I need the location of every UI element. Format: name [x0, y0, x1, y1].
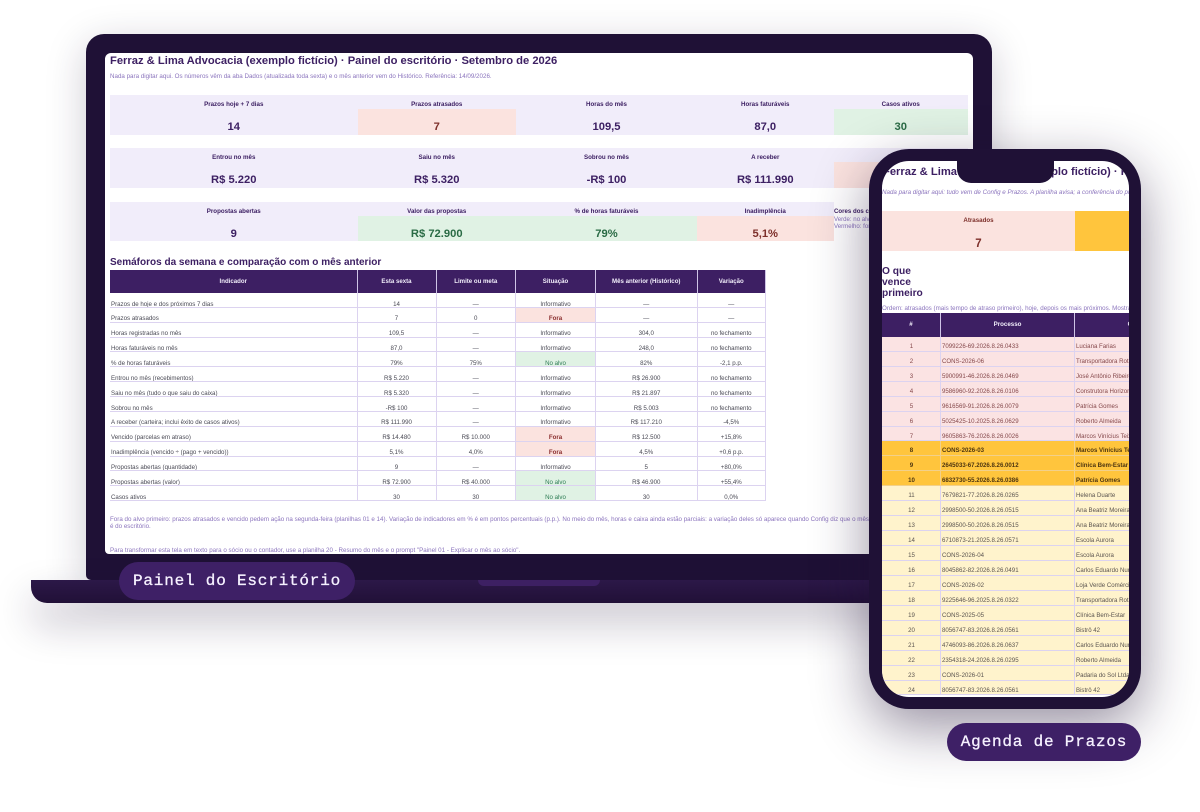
row 5	[882, 397, 1200, 412]
row 7: 9605863-76.2026.8.26.0026	[942, 433, 1019, 440]
row: sobrou: —	[473, 405, 479, 412]
row 20: Bistrô 42	[1076, 627, 1100, 634]
row 3	[882, 367, 1200, 382]
row 18: 9225646-96.2025.8.26.0322	[942, 597, 1019, 604]
row: prazos atrasados: —	[728, 315, 734, 322]
row 15: CONS-2026-04	[942, 552, 984, 559]
KPI: propostas abertas: Propostas abertas	[207, 208, 261, 215]
KPI: a receber: R$ 111.990	[737, 174, 794, 186]
row: entrou: R$ 26.900	[632, 375, 660, 382]
row: inadimplência: +0,6 p.p.	[719, 449, 743, 456]
row: saiu: Informativo	[540, 390, 571, 397]
row 11: Helena Duarte	[1076, 492, 1115, 499]
KPI: casos ativos	[834, 95, 968, 134]
phone	[869, 149, 1141, 709]
row: percentual de horas: 82%	[640, 360, 652, 367]
KPI: horas faturáveis	[697, 95, 834, 134]
row 2	[882, 352, 1200, 367]
row 22: 22	[908, 657, 915, 664]
row: a receber: R$ 111.990	[381, 419, 412, 426]
row 17: CONS-2026-02	[942, 582, 984, 589]
row 9: Clínica Bem-Estar	[1076, 462, 1128, 469]
row: propostas quantidade: —	[473, 464, 479, 471]
KPI: a receber: A receber	[751, 154, 779, 161]
row 17: 17	[908, 582, 915, 589]
row: inadimplência: Fora	[549, 449, 562, 456]
KPI: entrou no mês: Entrou no mês	[212, 154, 255, 161]
row: propostas valor	[110, 471, 766, 486]
row 6: Roberto Almeida	[1076, 418, 1121, 425]
KPI: prazos hoje + 7 dias	[110, 95, 358, 134]
row 22: 2354318-24.2026.8.26.0295	[942, 657, 1019, 664]
row 5: 9616569-91.2026.8.26.0079	[942, 403, 1019, 410]
row: horas faturáveis: 248,0	[639, 345, 654, 352]
KPI: saiu no mês	[358, 148, 516, 188]
row 12: 2998500-50.2026.8.26.0515	[942, 507, 1019, 514]
KPI: prazos hoje + 7 dias: Prazos hoje + 7 dias	[204, 101, 263, 108]
row: vencido: +15,8%	[721, 434, 742, 441]
row: horas faturáveis: 87,0	[391, 345, 402, 352]
row 23: Padaria do Sol Ltda	[1076, 672, 1129, 679]
KPI: sobrou no mês: -R$ 100	[587, 174, 626, 186]
row: propostas valor: Propostas abertas (valor)	[111, 479, 180, 486]
row 12: 12	[908, 507, 915, 514]
KPI: propostas abertas: 9	[231, 228, 237, 240]
row 19: Clínica Bem-Estar	[1076, 612, 1125, 619]
row 16	[882, 561, 1200, 576]
KPI: inadimplência: 5,1%	[752, 228, 778, 240]
row 6: 6	[910, 418, 913, 425]
row 6	[882, 412, 1200, 427]
row 9	[882, 456, 1200, 471]
row: propostas quantidade: Informativo	[540, 464, 571, 471]
row 24	[882, 681, 1200, 695]
row: saiu: Saiu no mês (tudo o que saiu do caixa)	[111, 390, 218, 397]
row 9: 9	[910, 462, 913, 469]
section heading: O que	[882, 266, 911, 276]
row: horas registradas: no fechamento	[711, 330, 752, 337]
table header: Processo	[994, 321, 1021, 328]
row: propostas quantidade: +80,0%	[721, 464, 742, 471]
row: percentual de horas: 75%	[470, 360, 482, 367]
KPI: entrou no mês: R$ 5.220	[211, 174, 256, 186]
row 19: CONS-2025-05	[942, 612, 984, 619]
row: propostas valor: No alvo	[545, 479, 566, 486]
row 19: 19	[908, 612, 915, 619]
row 2: 2	[910, 358, 913, 365]
table header: Indicador	[220, 278, 247, 285]
laptop base	[31, 580, 1047, 603]
row: casos ativos: No alvo	[545, 494, 566, 501]
phone notch	[957, 161, 1054, 183]
row 15	[882, 546, 1200, 561]
row 10: 10	[908, 477, 915, 484]
row 1: 7099226-69.2026.8.26.0433	[942, 343, 1019, 350]
row 2: CONS-2026-06	[942, 358, 984, 365]
row 14: 14	[908, 537, 915, 544]
row: casos ativos: 0,0%	[724, 494, 738, 501]
row 5: Patrícia Gomes	[1076, 403, 1118, 410]
section heading: primeiro	[882, 288, 923, 298]
KPI: valor das propostas: R$ 72.900	[411, 228, 463, 240]
row 13	[882, 516, 1200, 531]
row: percentual de horas: % de horas faturáveis	[111, 360, 170, 367]
row: a receber: Informativo	[540, 419, 571, 426]
phone screen: deadline agenda	[882, 161, 1129, 697]
label: Agenda de Prazos: Agenda de Prazos	[961, 733, 1127, 751]
row 24: Bistrô 42	[1076, 687, 1100, 694]
row 13: 13	[908, 522, 915, 529]
row 22: Roberto Almeida	[1076, 657, 1121, 664]
row: saiu: no fechamento	[711, 390, 752, 397]
row: horas registradas: —	[473, 330, 479, 337]
KPI: valor das propostas	[358, 202, 516, 241]
label: Painel do Escritório: Painel do Escritório	[133, 572, 341, 590]
row: entrou: —	[473, 375, 479, 382]
row 23: CONS-2026-01	[942, 672, 984, 679]
KPI: propostas abertas	[110, 202, 358, 241]
label: Agenda de Prazos	[947, 723, 1141, 761]
row: horas faturáveis: Horas faturáveis no mês	[111, 345, 178, 352]
row: saiu: R$ 21.897	[632, 390, 660, 397]
row 7	[882, 427, 1200, 441]
row: percentual de horas: 79%	[390, 360, 403, 367]
KPI: prazos atrasados	[358, 95, 516, 134]
KPI: entrou no mês	[110, 148, 358, 188]
KPI: horas do mês: Horas do mês	[586, 101, 627, 108]
KPI: casos ativos: Casos ativos	[882, 101, 920, 108]
KPI: atrasados: Atrasados	[963, 217, 994, 224]
row: prazos 7 dias: Informativo	[540, 300, 571, 308]
colour legend: Vermelho: fora do alvo	[834, 223, 895, 230]
KPI: prazos atrasados: 7	[434, 121, 440, 133]
laptop	[22, 24, 1012, 645]
KPI: valor das propostas: Valor das propostas	[407, 208, 466, 215]
KPI: horas do mês: 109,5	[592, 121, 620, 133]
row: propostas quantidade: 5	[645, 464, 648, 471]
row: entrou: Informativo	[540, 375, 571, 382]
row: prazos atrasados: 7	[395, 315, 398, 322]
row 11	[882, 486, 1200, 501]
row: inadimplência: 5,1%	[390, 449, 404, 456]
footnote	[110, 516, 869, 530]
colour legend: Verde: no alvo	[834, 216, 873, 223]
row 24: 24	[908, 687, 915, 694]
row 17	[882, 576, 1200, 591]
dashboard subtitle: Nada para digitar aqui. Os números vêm da aba Dados (atualizada toda sexta) e o mês anterior vem do Histórico. Referência: 14/09/2026.	[110, 72, 492, 80]
row: vencido: R$ 10.000	[462, 434, 490, 441]
row: vencido: Fora	[549, 434, 562, 441]
laptop hinge notch	[478, 580, 600, 586]
row 4: 4	[910, 388, 913, 395]
row: propostas valor: +55,4%	[721, 479, 742, 486]
KPI: horas do mês	[516, 95, 697, 134]
dashboard title: Ferraz & Lima Advocacia (exemplo fictício) · Painel do escritório · Setembro de 2026	[110, 54, 557, 66]
row 21: 21	[908, 642, 915, 649]
KPI: horas faturáveis: 87,0	[754, 121, 776, 133]
row: saiu	[110, 382, 766, 397]
row: saiu: —	[473, 390, 479, 397]
row: horas faturáveis	[110, 338, 766, 352]
row 8	[882, 441, 1200, 456]
row: prazos atrasados: —	[643, 315, 649, 322]
KPI: vencido	[834, 148, 968, 188]
row: entrou: Entrou no mês (recebimentos)	[111, 375, 194, 382]
row 7: 7	[910, 433, 913, 440]
row 3: 3	[910, 373, 913, 380]
row 5: 5	[910, 403, 913, 410]
footnote: é do escritório.	[110, 522, 151, 530]
row 18	[882, 591, 1200, 606]
row: casos ativos	[110, 486, 766, 501]
row: propostas quantidade: Propostas abertas (quantidade)	[111, 464, 197, 471]
KPI: vencido: R$ 14.480	[875, 174, 927, 186]
row: prazos 7 dias: Prazos de hoje e dos próximos 7 dias	[111, 300, 213, 308]
row 14: 6710873-21.2025.8.26.0571	[942, 537, 1019, 544]
row 6: 5025425-10.2025.8.26.0629	[942, 418, 1019, 425]
row: prazos 7 dias: —	[473, 300, 479, 308]
row 8: 8	[910, 447, 913, 454]
row 22	[882, 651, 1200, 666]
row 1: Luciana Farias	[1076, 343, 1116, 350]
row: horas registradas: Informativo	[540, 330, 571, 337]
KPI: prazos hoje + 7 dias: 14	[228, 121, 240, 133]
row: horas registradas: 109,5	[389, 330, 404, 337]
row 14: Escola Aurora	[1076, 537, 1114, 544]
KPI: atrasados: 7	[975, 238, 982, 250]
row: percentual de horas: No alvo	[545, 360, 566, 367]
row 11: 11	[908, 492, 915, 499]
row: inadimplência: Inadimplência (vencido ÷ (pago + vencido))	[111, 449, 229, 456]
deadlines table	[882, 313, 1129, 695]
row: horas faturáveis: —	[473, 345, 479, 352]
KPI: horas faturáveis: Horas faturáveis	[741, 101, 790, 108]
colour legend: Cores dos cartões	[834, 208, 887, 215]
row: entrou: R$ 5.220	[384, 375, 409, 382]
closing note: Para transformar esta tela em texto para o sócio ou o contador, use a planilha 20 - Resumo do mês e o prompt "Painel 01 - Explicar o mês ao sócio".	[110, 547, 520, 554]
table header	[110, 270, 766, 293]
row: prazos 7 dias: —	[643, 300, 649, 308]
row 4	[882, 382, 1200, 397]
row: prazos atrasados: 0	[474, 315, 477, 322]
row: casos ativos: 30	[472, 494, 479, 501]
row: horas registradas	[110, 323, 766, 338]
KPI: % de horas faturáveis: % de horas faturáveis	[575, 208, 638, 215]
KPI: atrasados	[882, 211, 1075, 251]
row 16: 8045862-82.2026.8.26.0491	[942, 567, 1019, 574]
KPI: vencido: Vencido	[889, 154, 913, 161]
row 19	[882, 606, 1200, 621]
KPI: saiu no mês: Saiu no mês	[419, 154, 455, 161]
row 15: Escola Aurora	[1076, 552, 1114, 559]
row: propostas valor: R$ 46.900	[632, 479, 660, 486]
row: casos ativos: 30	[393, 494, 400, 501]
row: percentual de horas	[110, 352, 766, 367]
row 21	[882, 636, 1200, 651]
row 13: Ana Beatriz Moreira	[1076, 522, 1129, 529]
row 21: 4746093-86.2026.8.26.0637	[942, 642, 1019, 649]
section heading: vence	[882, 276, 911, 288]
row 13: 2998500-50.2026.8.26.0515	[942, 522, 1019, 529]
row 1	[882, 337, 1200, 352]
row: sobrou: R$ 5.003	[634, 405, 659, 412]
row 18: 18	[908, 597, 915, 604]
row 20	[882, 621, 1200, 636]
row: propostas valor: R$ 72.900	[382, 479, 411, 486]
row 8: CONS-2026-03	[942, 447, 984, 454]
row 15: 15	[908, 552, 915, 559]
row: prazos atrasados	[110, 308, 766, 323]
laptop lid	[86, 34, 992, 580]
row: inadimplência	[110, 442, 766, 457]
row: entrou	[110, 367, 766, 382]
row 23: 23	[908, 672, 915, 679]
row: horas faturáveis: no fechamento	[711, 345, 752, 352]
KPI: casos ativos: 30	[895, 121, 907, 133]
row: horas registradas: Horas registradas no mês	[111, 330, 181, 337]
row: a receber: —	[473, 419, 479, 426]
table header: Mês anterior (Histórico)	[612, 278, 680, 285]
row 1: 1	[910, 343, 913, 350]
row: vencido: R$ 12.500	[632, 434, 660, 441]
row: propostas valor: R$ 40.000	[462, 479, 490, 486]
row: propostas quantidade	[110, 457, 766, 471]
row: vencido: Vencido (parcelas em atraso)	[111, 434, 191, 441]
KPI: a receber	[697, 148, 834, 188]
table header: Situação	[543, 278, 568, 285]
row: a receber: -4,5%	[723, 419, 739, 426]
row: sobrou: Sobrou no mês	[111, 405, 153, 412]
section heading: Semáforos da semana e comparação com o mês anterior	[110, 257, 381, 268]
table header: #	[909, 321, 913, 328]
row 9: 2645033-67.2026.8.26.0012	[942, 462, 1019, 469]
row 10	[882, 471, 1200, 486]
label: Painel do Escritório	[119, 562, 355, 600]
row: propostas quantidade: 9	[395, 464, 398, 471]
table header: Limite ou meta	[454, 278, 497, 285]
section heading	[882, 266, 923, 298]
table header	[882, 313, 1129, 337]
row 14	[882, 531, 1200, 546]
KPI: % de horas faturáveis	[516, 202, 697, 241]
row 20: 8056747-83.2026.8.26.0561	[942, 627, 1019, 634]
comparison table	[110, 270, 766, 501]
row 20: 20	[908, 627, 915, 634]
row: saiu: R$ 5.320	[384, 390, 409, 397]
KPI: prazos atrasados: Prazos atrasados	[411, 101, 462, 108]
row: a receber: A receber (carteira; inclui êxito de casos ativos)	[111, 419, 240, 426]
KPI: sobrou no mês: Sobrou no mês	[584, 154, 629, 161]
KPI: vencem hoje	[1075, 211, 1129, 251]
row: prazos atrasados: Fora	[549, 315, 562, 322]
row: prazos 7 dias: —	[728, 300, 734, 308]
KPI: inadimplência: Inadimplência	[745, 208, 786, 215]
row: casos ativos: 30	[643, 494, 650, 501]
row: prazos atrasados: Prazos atrasados	[111, 315, 159, 322]
laptop screen: office dashboard	[105, 53, 973, 554]
row: sobrou	[110, 397, 766, 412]
row: inadimplência: 4,5%	[639, 449, 653, 456]
row: vencido	[110, 427, 766, 442]
row 10: Patrícia Gomes	[1076, 477, 1120, 484]
row 10: 6832730-55.2026.8.26.0386	[942, 477, 1019, 484]
row: prazos 7 dias	[110, 293, 766, 308]
row: a receber	[110, 412, 766, 427]
KPI: saiu no mês: R$ 5.320	[414, 174, 459, 186]
row: casos ativos: Casos ativos	[111, 494, 146, 501]
row: inadimplência: 4,0%	[469, 449, 483, 456]
row 24: 8056747-83.2026.8.26.0561	[942, 687, 1019, 694]
row: vencido: R$ 14.480	[382, 434, 411, 441]
table header: Variação	[719, 278, 744, 285]
row: sobrou: -R$ 100	[386, 405, 407, 412]
KPI: sobrou no mês	[516, 148, 697, 188]
row: horas faturáveis: Informativo	[540, 345, 571, 352]
colour legend	[834, 208, 895, 230]
row 23	[882, 666, 1200, 681]
KPI: % de horas faturáveis: 79%	[595, 228, 618, 240]
row: a receber: R$ 117.210	[631, 419, 662, 426]
row: horas registradas: 304,0	[639, 330, 654, 337]
row 12: Ana Beatriz Moreira	[1076, 507, 1129, 514]
row: sobrou: Informativo	[540, 405, 571, 412]
row: entrou: no fechamento	[711, 375, 752, 382]
KPI: inadimplência	[697, 202, 834, 241]
table header: Esta sexta	[381, 278, 412, 285]
row: percentual de horas: -2,1 p.p.	[720, 360, 743, 367]
row 4: 9586960-92.2026.8.26.0106	[942, 388, 1019, 395]
row 3: 5900991-46.2026.8.26.0469	[942, 373, 1019, 380]
row: prazos 7 dias: 14	[393, 300, 400, 308]
footnote: Fora do alvo primeiro: prazos atrasados e vencido pedem ação na segunda-feira (planilhas 01 e 14). Variação de indicadores em % é em pontos percentuais (p.p.). No meio do mês, horas e caixa ainda estão parciais: a variação deles só aparece quando Config diz que o mês	[110, 516, 869, 522]
row 16: 16	[908, 567, 915, 574]
row 12	[882, 501, 1200, 516]
row 11: 7679821-77.2026.8.26.0265	[942, 492, 1019, 499]
row: sobrou: no fechamento	[711, 405, 752, 412]
